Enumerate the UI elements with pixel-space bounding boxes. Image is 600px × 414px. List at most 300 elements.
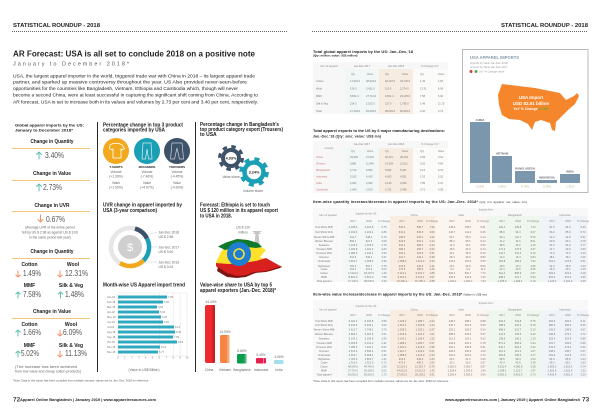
table 3: quantity by item: 151.4 <box>515 251 522 255</box>
table 3: quantity by item: 5.36 <box>580 225 586 229</box>
table 3: quantity by item: 19.3 <box>549 267 555 271</box>
table 4: value by item: 4,894.1 <box>349 332 358 336</box>
table 3: quantity by item: Indonesia <box>559 213 571 217</box>
table 4: value by item: 381.8 <box>499 353 506 357</box>
table 4: value by item: 265.3 <box>465 328 472 332</box>
table 4: value by item: 0.98 <box>429 345 435 349</box>
table 3: quantity by item: 95.6 <box>465 239 471 243</box>
table 3: quantity by item: 1,260.4 <box>448 279 457 283</box>
US map: YoY % Change 2.73% <box>513 107 550 111</box>
category values: (+1.50%) <box>109 186 123 190</box>
change in quantity by fibre: Wool <box>67 262 80 268</box>
table 4: value by item: Woven Shirts M/B <box>314 328 335 332</box>
table 4: value by item: 49.3 <box>549 360 555 364</box>
table 2: exports by destination: 2,010 <box>366 188 373 192</box>
table 3: quantity by item: 5.93 <box>530 275 536 279</box>
change in quantity by fibre: MMF <box>24 283 35 289</box>
table 3: quantity by item: 3.27 <box>530 247 536 251</box>
table 4: value by item: 1.23 <box>429 336 435 340</box>
table 4: value by item: 5,021.6 <box>365 332 374 336</box>
table 3: quantity by item: 920.3 <box>449 271 456 275</box>
bar chart: Nov-18 <box>107 345 116 349</box>
table 4: value by item: 62.1 <box>449 357 455 361</box>
table 4: value by item: 4,050.9 <box>514 364 523 368</box>
table 3: quantity by item: 20.3 <box>465 247 471 251</box>
table 4: value by item: % Change <box>577 313 590 317</box>
heading: apparel exporters (Jan.-Dec. 2018)* <box>200 288 276 294</box>
table 4: value by item: 1,295.7 <box>416 341 425 345</box>
table 3: quantity by item: 5,012.5 <box>398 275 407 279</box>
heading: categories imported by USA <box>103 128 165 134</box>
category values: (-7.46%) <box>141 174 153 178</box>
intro paragraph: AR forecast, USA is set to increase both in its values and volumes by 2.73 per cent and 3.40 per cent, respectively. <box>13 100 258 104</box>
table 4: value by item: 1,781.2 <box>349 357 358 361</box>
table 3: quantity by item: 17,931.0 <box>348 271 359 275</box>
table 4: value by item: 306.4 <box>565 319 572 323</box>
3D bar chart: 44.44% <box>205 300 217 304</box>
table 3: quantity by item: 2,324.8 <box>365 225 374 229</box>
heading: Month-wise US Apparel import trend <box>103 282 185 288</box>
table 4: value by item: 3.91 <box>429 372 435 376</box>
table 3: quantity by item: 6.2 <box>450 267 454 271</box>
table 2: exports by destination: 4,003 <box>385 174 392 178</box>
table 4: value by item: 5.57 <box>480 332 486 336</box>
table 4: value by item: 5,244.6 <box>349 323 358 327</box>
table 4: value by item: 7,432.1 <box>365 345 374 349</box>
table 4: value by item: 280.2 <box>549 323 556 327</box>
table 3: quantity by item: 2,198.3 <box>349 225 358 229</box>
table 1: global imports: 49,746.0 <box>400 79 411 83</box>
table 4: value by item: 12,310.7 <box>415 364 426 368</box>
table 4: value by item: 1,205.1 <box>416 328 425 332</box>
table 3: quantity by item: 5.91 <box>580 235 586 239</box>
table 4: value by item: 640.6 <box>417 357 424 361</box>
table 4: value by item: 260.8 <box>549 332 556 336</box>
fibre note <box>15 365 81 374</box>
bar chart: 8.13 <box>175 325 181 329</box>
table 2: exports by destination: 2.33 <box>420 174 426 178</box>
heading: Value-wise share to USA by top 5 <box>200 282 272 288</box>
3D bar chart: Vietnam <box>219 368 231 372</box>
table 2: exports by destination: 4.38 <box>438 188 444 192</box>
bar chart: 5.66 <box>158 305 164 309</box>
table 4: value by item: 138.6 <box>499 336 506 340</box>
change in UVR: fell by US $ 2.98 as against US $ 3.00 <box>22 230 78 234</box>
table 3: quantity by item: 630.8 <box>417 230 424 234</box>
table 3: quantity by item: 2018 <box>515 219 521 223</box>
table 1: global imports: 2,023.0 <box>366 102 375 106</box>
table 4: value by item: 515.6 <box>465 332 472 336</box>
table 2: exports by destination: 27,042 <box>366 155 374 159</box>
table 4: value by item: 470.3 <box>549 345 556 349</box>
table 4: value by item: 1,402.2 <box>398 345 407 349</box>
table 2: exports by destination: 28,103 <box>400 155 408 159</box>
table 4: value by item: 239.7 <box>565 349 572 353</box>
table 3: quantity by item: 1,388.6 <box>398 259 407 263</box>
table 2: exports by destination: 3.91 <box>438 155 444 159</box>
table 2: exports by destination: Country <box>324 146 334 150</box>
icon: value share gear: 4.93% <box>226 156 237 160</box>
table 3: quantity by item: Dresses <box>319 255 329 259</box>
table 2: exports by destination: 4.94 <box>438 162 444 166</box>
table 3: quantity by item: 5,211.3 <box>416 275 425 279</box>
table 4: value by item: 112.3 <box>449 336 456 340</box>
icon: trousers circle <box>164 138 190 164</box>
table 3: quantity by item: 7.76 <box>480 271 486 275</box>
heading <box>103 202 182 214</box>
table 4: value by item: 142.3 <box>549 328 556 332</box>
table 4: value by item: 1,198.3 <box>398 328 407 332</box>
table 4: value by item: 3.06 <box>480 357 486 361</box>
bar chart: 4 <box>145 356 147 360</box>
table 3: quantity by item: 310.2 <box>417 239 424 243</box>
intro paragraph: partner, and sparked up massive controversy throughout the year. US Also provided never-seen-before <box>13 80 247 84</box>
table 3: quantity by item: 96.4 <box>499 235 505 239</box>
table 4: value by item: 3,612.7 <box>349 328 358 332</box>
table 4: value by item: 1,321.9 <box>365 360 374 364</box>
table 3: quantity by item: 8.60 <box>480 264 486 268</box>
table 4: value by item: 335.8 <box>465 345 472 349</box>
change in quantity by fibre: 7.58% <box>23 289 41 299</box>
table 4: value by item: 1.09 <box>480 349 486 353</box>
left page footer: 72 <box>13 396 21 404</box>
table 4: value by item: % Change <box>527 313 540 317</box>
table 2: exports by destination: % Change YoY <box>421 142 439 146</box>
table 4: value by item: 7,386.5 <box>349 345 358 349</box>
table 4: value by item: 140.2 <box>515 336 522 340</box>
table 3: quantity by item: 221.7 <box>399 255 406 259</box>
table 4: value by item: 26.9 <box>465 360 471 364</box>
bar chart: 8.54 <box>178 340 184 344</box>
table 3: quantity by item: 9.14 <box>480 247 486 251</box>
table 3: quantity by item: 4.10 <box>429 243 435 247</box>
table 3: quantity by item: 2018 <box>366 219 372 223</box>
table 1: global imports: 2,274.0 <box>400 86 409 90</box>
change in quantity by fibre: 1.48% <box>65 289 84 299</box>
table 3: quantity by item: 1,360.3 <box>464 279 473 283</box>
table 4: value by item: 14,012.5 <box>397 368 408 372</box>
table 4: value by item: 6,002.8 <box>349 341 358 345</box>
table 3: quantity by item: 521.4 <box>565 275 572 279</box>
table 3: quantity by item: 440.6 <box>417 264 424 268</box>
table 3: quantity by item: Woven Shirts M/B <box>314 235 335 239</box>
table 3: quantity by item: 5.50 <box>530 235 536 239</box>
table 4: value by item: Bangladesh <box>508 308 522 312</box>
table 2: exports by destination: Jan-Dec 2018 <box>388 142 405 146</box>
subtitle: January to December 2018* <box>13 62 130 68</box>
table 3: quantity by item: Total apparel <box>317 279 332 283</box>
table 4: value by item: 252.1 <box>449 328 456 332</box>
table 3: quantity by item: Imports from <box>479 208 493 212</box>
table 3: quantity by item: Bangladesh <box>508 213 522 217</box>
table 1: global imports: 217.0 <box>385 102 392 106</box>
table 4 heading: Item-wise value increase/decrease in apparel imports by the US: Jan.-Dec. 2018* (Value in US$ mn) <box>313 292 487 296</box>
table 4: value by item: 12,214.1 <box>397 364 408 368</box>
table 3: quantity by item: 10,700.1 <box>415 279 426 283</box>
table 1 heading: (Qty: million; value: US$ million) <box>313 54 358 58</box>
table 4: value by item: 81,092.0 <box>348 372 359 376</box>
table 2: exports by destination: India <box>316 181 322 185</box>
table 4: value by item: 28,103.0 <box>415 372 426 376</box>
table 4: value by item: 1.84 <box>480 368 486 372</box>
table 4: value by item: 302.4 <box>499 319 506 323</box>
bar chart: top exporters: BANGLADESH <box>515 166 535 170</box>
table 3: quantity by item: 4.15 <box>580 267 586 271</box>
table 2: exports by destination: 3.20 <box>438 174 444 178</box>
table 4: value by item: 2.36 <box>381 353 387 357</box>
table 3: quantity by item: 1.85 <box>429 271 435 275</box>
table 3: quantity by item: % Change <box>577 219 590 223</box>
change in value by fibre: 5.02% <box>21 348 39 358</box>
table 4: value by item: 2.33 <box>429 353 435 357</box>
table 3: quantity by item: 4.77 <box>580 243 586 247</box>
table 4: value by item: 472.6 <box>399 360 406 364</box>
heading: top product category export (Trousers) <box>200 127 283 133</box>
table 3: quantity by item: 421.7 <box>515 275 522 279</box>
table 4: value by item: 4.72 <box>580 332 586 336</box>
change in quantity by fibre: Silk & Veg <box>59 283 83 289</box>
table 4: value by item: 48,934.0 <box>348 364 359 368</box>
donut labels: US $ 3.04 <box>158 265 173 269</box>
table 3: quantity by item: China <box>411 213 418 217</box>
table 3: quantity by item: 172.6 <box>399 267 406 271</box>
table 4: value by item: 1.44 <box>429 357 435 361</box>
table 3: quantity by item: 4,028.4 <box>365 259 374 263</box>
table 3: quantity by item: 802.7 <box>366 264 373 268</box>
table 2: exports by destination: 12,011 <box>400 162 408 166</box>
table 1: global imports: Qty <box>385 72 390 76</box>
change in quantity by fibre: Change in Quantity <box>30 249 74 255</box>
table 3: quantity by item: MMF <box>321 275 327 279</box>
table 4: value by item: 1,229.2 <box>416 349 425 353</box>
table 4: value by item: 401.4 <box>549 353 556 357</box>
category values: (-4.45%) <box>171 174 183 178</box>
table 3: quantity by item: 39.7 <box>565 255 571 259</box>
table 4: value by item: 0.74 <box>580 364 586 368</box>
table 4: value by item: % Change <box>477 313 490 317</box>
table 3: quantity by item: 850.9 <box>515 271 522 275</box>
table 1 heading: Total global apparel imports by the US: Jan.-Dec.'18 <box>313 49 414 54</box>
table 1: global imports: % Change YoY <box>421 64 439 68</box>
table 2: exports by destination: 5,401 <box>400 168 407 172</box>
bar chart: 6.50 <box>164 320 170 324</box>
table 4: value by item: 86.8 <box>565 357 571 361</box>
table 4: value by item: Cotton <box>320 364 328 368</box>
table 4: value by item: 26.2 <box>449 360 455 364</box>
table 3: quantity by item: Woven Blouses <box>315 239 334 243</box>
heading: Forecast: Ethiopia is set to touch <box>200 202 270 208</box>
table 2: exports by destination: 5,002 <box>385 168 392 172</box>
change in UVR: in the same period last year) <box>29 236 71 240</box>
change in value by fibre: Cotton <box>21 322 38 328</box>
table 4: value by item: 1,521.4 <box>564 368 573 372</box>
table 4: value by item: 0.56 <box>580 341 586 345</box>
panel: Bangladesh top product export <box>200 122 283 193</box>
table 3: quantity by item: 176.9 <box>515 247 522 251</box>
table 4: value by item: 521.7 <box>515 328 522 332</box>
table 4: value by item: 2017 <box>449 313 455 317</box>
bar chart: 7.99 <box>174 335 180 339</box>
table 4: value by item: MMF <box>321 368 327 372</box>
table 3: quantity by item: 3,912.7 <box>349 259 358 263</box>
infographic title and legend: YoY % Change value <box>479 70 505 74</box>
icon: tower <box>252 231 262 247</box>
table 3: quantity by item: Coats <box>321 267 328 271</box>
table 2: exports by destination: Qty <box>420 149 425 153</box>
table 3: quantity by item: 318.4 <box>449 275 456 279</box>
table 3: quantity by item: 12.3 <box>449 243 455 247</box>
table 4: value by item: 4,551.3 <box>564 372 573 376</box>
value callout: million <box>238 230 248 234</box>
3D bar chart: India <box>275 368 283 372</box>
category values: Value <box>112 181 120 185</box>
bar chart: top exporters: 9.85% <box>498 184 506 188</box>
table 3: quantity by item: 2.96 <box>381 259 387 263</box>
infographic title and legend <box>470 55 519 74</box>
table 3: quantity by item: 6.10 <box>530 251 536 255</box>
table 4: value by item: 6.70 <box>530 372 536 376</box>
table 2: exports by destination: 11,445 <box>366 162 374 166</box>
table 2: exports by destination: 6.70 <box>438 168 444 172</box>
table 1: global imports: 1.66 <box>438 79 444 83</box>
table 4: value by item: 5.50 <box>480 323 486 327</box>
table 3: quantity by item: 6.9 <box>466 267 470 271</box>
bar chart: top exporters: 3.20% <box>543 184 551 188</box>
table 3: quantity by item: 991.7 <box>465 271 472 275</box>
table 1: global imports <box>313 62 448 114</box>
table 3: quantity by item: 8,831.0 <box>349 275 358 279</box>
table 3: quantity by item: 4.86 <box>530 264 536 268</box>
table 4: value by item: 396.2 <box>515 353 522 357</box>
bar chart: 8 <box>172 356 174 360</box>
table 4: value by item: 218.6 <box>449 341 456 345</box>
table 4: value by item: 3,260.4 <box>448 372 457 376</box>
table 4: value by item: 0.67 <box>580 349 586 353</box>
table 3: quantity by item: 23.8 <box>515 267 521 271</box>
table 4: value by item: Knit Shirts M/B <box>315 319 333 323</box>
bar chart <box>107 293 189 372</box>
table 4: value by item: 3.75 <box>381 328 387 332</box>
bar chart: top exporters: 6.70% <box>521 184 529 188</box>
table 4: value by item: Trousers W/G <box>316 345 332 349</box>
intro paragraph: USA, the largest apparel importer in the world, triggered trade war with China in 2018 – its largest apparel trade <box>13 74 255 78</box>
table 4: value by item: 1,198.1 <box>498 368 507 372</box>
right page footer <box>444 396 590 404</box>
table 2: exports by destination: 3,290 <box>366 181 373 185</box>
table 3: quantity by item: 9,501.0 <box>365 275 374 279</box>
table 3: quantity by item: 3.18 <box>580 271 586 275</box>
intro paragraph <box>13 74 258 104</box>
table 4: value by item: Underwear <box>318 353 330 357</box>
panel: USA apparel imports infographic <box>462 50 588 192</box>
table 3: quantity by item: 642.1 <box>399 243 406 247</box>
table 4: value by item: 6,021.3 <box>349 319 358 323</box>
table 4: value by item: 64.0 <box>465 357 471 361</box>
bar chart: 8.30 <box>176 330 182 334</box>
table 4: value by item: 4,912.7 <box>349 353 358 357</box>
table 3: quantity by item: Knit Shirts M/B <box>315 225 333 229</box>
table 3: quantity by item: 3.47 <box>381 255 387 259</box>
table 1: global imports: Qty <box>351 72 356 76</box>
table 3: quantity by item: 54.9 <box>565 243 571 247</box>
change in UVR: Change in UVR <box>34 203 70 209</box>
heading: to USA <box>200 132 217 138</box>
right page footer: 73 <box>582 396 590 404</box>
table 4: value by item: Dresses <box>319 349 329 353</box>
bar chart: Feb-18 <box>107 300 116 304</box>
heading: USA (3-year comparison) <box>103 208 157 214</box>
table 4: value by item: 2,622.4 <box>564 364 573 368</box>
table 3: quantity by item: 44.8 <box>565 235 571 239</box>
table 2: exports by destination: China <box>316 155 323 159</box>
table 1: global imports: 214.0 <box>350 102 357 106</box>
table 4: value by item: % Change <box>378 313 391 317</box>
bar chart: Sep-18 <box>107 335 116 339</box>
change in quantity by fibre: 1.49% <box>23 268 41 278</box>
table 1: global imports: 110.0 <box>385 86 392 90</box>
table 3: quantity by item: 5.19 <box>530 279 536 283</box>
table 4: value by item: 332.7 <box>449 323 456 327</box>
table 4: value by item: 2.31 <box>381 341 387 345</box>
table 4: value by item: 59.4 <box>515 357 521 361</box>
table 4: value by item: 2017 <box>549 313 555 317</box>
table 4: value by item: 4,410.4 <box>548 372 557 376</box>
table 4: value by item: 1.62 <box>580 360 586 364</box>
bar chart: top exporters: INDIA <box>566 170 574 174</box>
table 2: exports by destination: Jan-Dec 2017 <box>354 142 371 146</box>
table 4: value by item: 5.24 <box>480 328 486 332</box>
heading <box>103 122 183 134</box>
table 3: quantity by item: 612.4 <box>399 230 406 234</box>
table 4: value by item: 0.62 <box>580 345 586 349</box>
table 3: quantity by item: 5,214.1 <box>398 271 407 275</box>
table 3: quantity by item: 1,002.8 <box>349 247 358 251</box>
table 1: global imports: 7.58 <box>420 94 426 98</box>
bar chart: top exporters: 3.26% <box>476 184 484 188</box>
change in quantity: Change in Quantity <box>30 139 74 145</box>
table 3: quantity by item: 3.29 <box>381 251 387 255</box>
table 2: exports by destination: 5,062 <box>366 168 373 172</box>
table 3: quantity by item: 431.5 <box>399 264 406 268</box>
bar chart: 6.50 <box>164 300 170 304</box>
table 3: quantity by item: Sweaters <box>319 243 330 247</box>
bar chart: Mar-18 <box>107 305 116 309</box>
table 1: global imports: 8,831.0 <box>350 94 359 98</box>
table 4: value by item: 3.20 <box>580 372 586 376</box>
table 4: value by item: Item of apparel <box>319 308 337 312</box>
table 3: quantity by item: 88.4 <box>449 239 455 243</box>
table 2: exports by destination: 3.26 <box>420 162 426 166</box>
table 3: quantity by item: 11.2 <box>481 267 486 271</box>
table 3: quantity by item: 88.9 <box>499 230 505 234</box>
table 4: value by item: 2017 <box>350 313 356 317</box>
table 3: quantity by item: 6.25 <box>530 267 536 271</box>
change in quantity by fibre: Cotton <box>21 262 38 268</box>
bar chart: top exporters: 2.31% <box>566 184 574 188</box>
table 4: value by item: 342.0 <box>449 353 456 357</box>
category values <box>109 170 183 190</box>
table 3: quantity by item: 6.50 <box>480 243 486 247</box>
category values: Value <box>173 181 181 185</box>
left page header: STATISTICAL ROUNDUP - 2018 <box>13 23 100 29</box>
table 3: quantity by item: 30.9 <box>465 255 471 259</box>
table 3: quantity by item: 22.4 <box>499 267 505 271</box>
table 3: quantity by item: 921.6 <box>366 239 373 243</box>
table 3: quantity by item: 4.20 <box>580 255 586 259</box>
table 4: value by item: 1.66 <box>381 364 387 368</box>
table 2: exports by destination: 2,901 <box>350 181 357 185</box>
table 3: quantity by item: 7.60 <box>480 275 486 279</box>
